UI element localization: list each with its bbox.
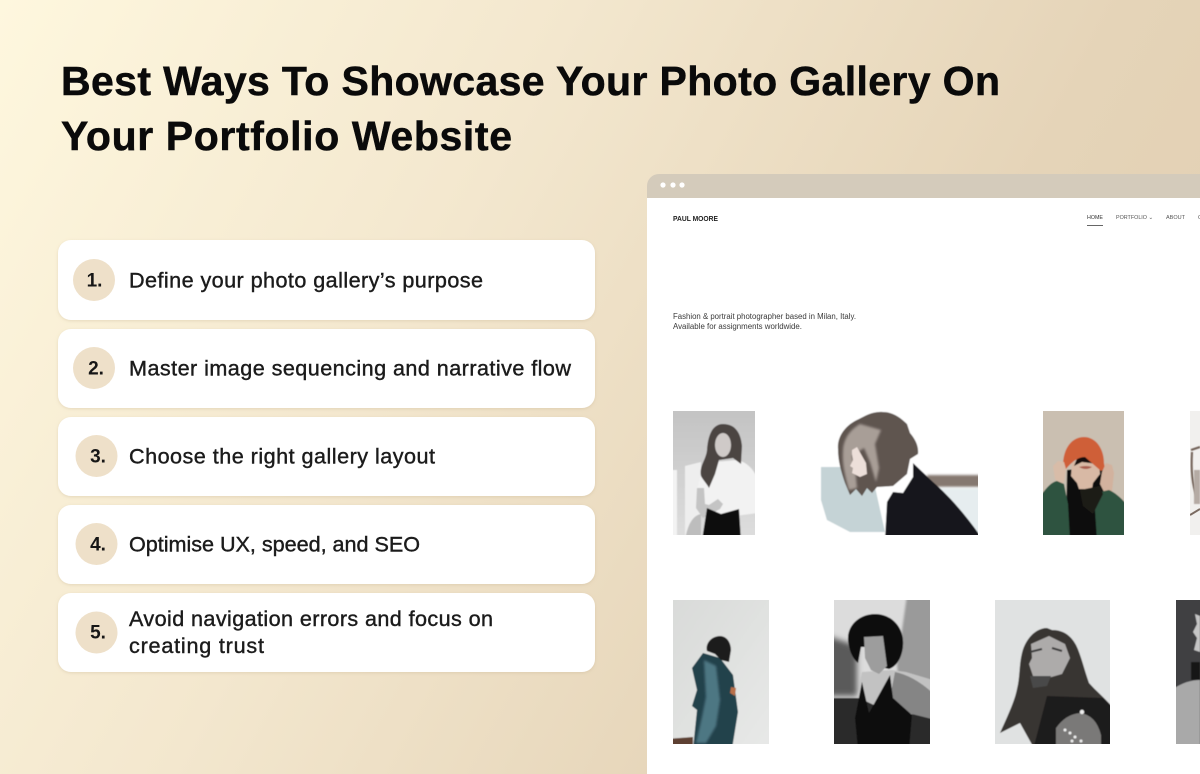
tip card 1: 1. [87,270,102,292]
tip card 5 [58,593,595,672]
site navigation: PORTFOLIO ⌄ [1116,215,1153,221]
tip card 3: Choose the right gallery layout [129,444,435,468]
tip card 1: Define your photo gallery’s purpose [129,268,483,292]
tip card 5: 5. [90,622,106,644]
site intro text [673,312,856,331]
photo: woman in white shirt [673,411,755,535]
tip card 2: Master image sequencing and narrative flow [129,356,571,380]
title [61,58,1000,159]
tip card 2 [58,329,595,408]
browser title bar [647,174,1200,198]
photo: partly cropped portrait [1190,411,1200,535]
title: Best Ways To Showcase Your Photo Gallery On [61,58,1000,104]
site navigation [1087,215,1200,226]
site intro text: Available for assignments worldwide. [673,322,802,331]
tip card 4: Optimise UX, speed, and SEO [129,532,420,556]
tip card 2: 2. [88,358,104,380]
title: Your Portfolio Website [61,113,512,159]
tip card 4: 4. [90,534,106,556]
browser window mockup [647,174,1200,774]
tip card 3 [58,417,595,496]
photo: woman with curly hair [834,600,930,744]
photo: partly cropped dark portrait [1176,600,1200,744]
photo: woman in teal coat [673,600,769,744]
site navigation: HOME [1087,215,1103,221]
browser page [647,198,1200,774]
site intro text: Fashion & portrait photographer based in Milan, Italy. [673,312,856,321]
photo: woman with orange hat [1043,411,1124,535]
list of five tips [58,240,595,672]
tip card 5: Avoid navigation errors and focus on [129,606,493,631]
tip card 5: creating trust [129,633,264,658]
tip card 1 [58,240,595,320]
photo: woman with short hair in profile [820,411,978,535]
site name: PAUL MOORE [673,216,718,223]
photo: woman looking up [995,600,1110,744]
tip card 3: 3. [90,446,106,468]
site navigation: ABOUT [1166,215,1186,221]
tip card 4 [58,505,595,584]
